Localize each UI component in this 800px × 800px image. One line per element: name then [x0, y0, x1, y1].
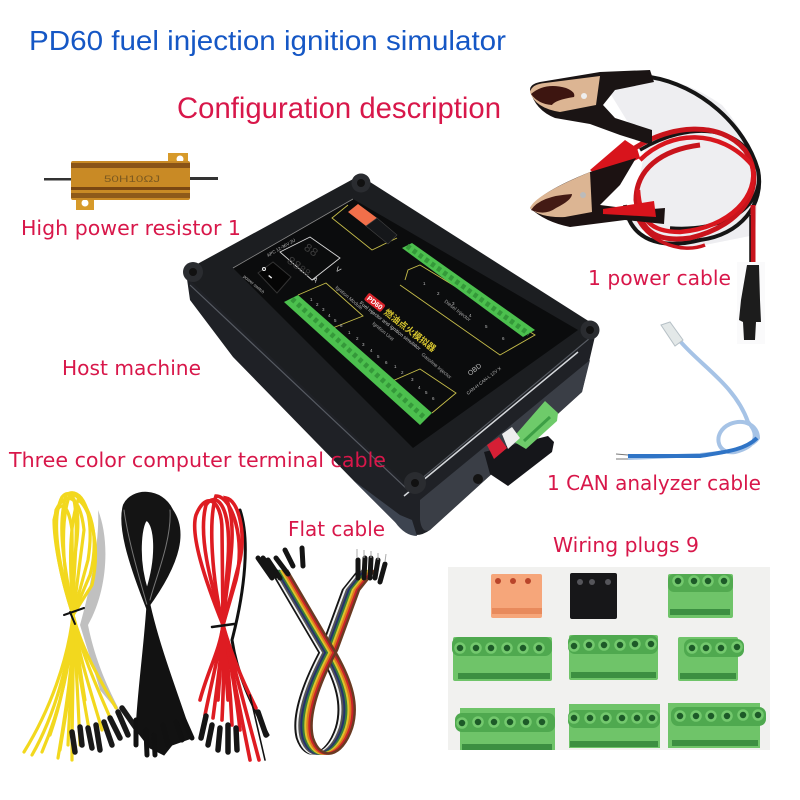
- plug: green 4 pin: [668, 574, 733, 618]
- pin numbers left: 2: [401, 370, 404, 375]
- orange and black ports: [348, 204, 377, 226]
- host machine: APC 12-36V 2U: [266, 238, 296, 258]
- pin numbers left: 4: [328, 313, 331, 318]
- panel labels: Fuel injector and ignition simulator: [358, 301, 422, 352]
- pin numbers left: 6: [340, 323, 343, 328]
- host machine: OBD: [467, 363, 483, 378]
- plug: orange 3 pin: [491, 574, 542, 618]
- pin numbers left: 6: [432, 396, 435, 401]
- pin numbers left: 2: [356, 336, 359, 341]
- icon: flat ribbon cable: [258, 548, 386, 754]
- yellow outline groups: [280, 205, 535, 413]
- plug: green 6 pin: [455, 708, 555, 750]
- host machine: power switch: [242, 274, 266, 295]
- icon: red wire bundle: [195, 496, 268, 760]
- pin numbers left: [310, 281, 505, 401]
- pin numbers left: 4: [418, 385, 421, 390]
- pin numbers left: 5: [425, 390, 428, 395]
- pin numbers left: 4: [469, 313, 472, 318]
- side ports: [484, 436, 554, 486]
- plug: green 6 pin: [452, 637, 552, 681]
- panel: wiring plugs: [448, 567, 770, 750]
- label: terminal cable: Three color computer terminal cable: [8, 448, 386, 472]
- host machine: [183, 174, 600, 536]
- pin numbers left: 5: [377, 354, 380, 359]
- box top: [188, 177, 596, 486]
- voltage and current display: 88: [301, 241, 321, 261]
- plug: green 4 pin: [678, 637, 744, 681]
- host machine: Gasoline Injector: [420, 352, 453, 381]
- pin numbers left: 2: [437, 291, 440, 296]
- host machine: Ignition Module: [334, 285, 364, 311]
- voltage and current display: 88: [296, 264, 312, 280]
- red clip: [590, 140, 640, 178]
- DC plug: [737, 262, 765, 344]
- pin numbers left: 5: [485, 324, 488, 329]
- subtitle: Configuration description: [177, 92, 501, 125]
- power switch: [258, 262, 291, 293]
- pin numbers left: 3: [322, 307, 325, 312]
- icon: power cable with clips: [530, 70, 765, 344]
- panel face: [233, 199, 578, 448]
- label: CAN cable: 1 CAN analyzer cable: [547, 471, 761, 495]
- green terminal strips: [284, 295, 432, 425]
- label: host machine: Host machine: [62, 356, 201, 380]
- pin numbers left: 1: [423, 281, 426, 286]
- voltage and current display: [284, 241, 321, 280]
- pin numbers left: 3: [411, 377, 414, 382]
- icon: CAN analyzer cable: [616, 322, 758, 459]
- pin numbers left: 3: [362, 342, 365, 347]
- label: wiring plugs: Wiring plugs 9: [553, 533, 699, 557]
- panel labels: [358, 291, 438, 359]
- pin numbers left: 1: [394, 364, 397, 369]
- host machine: Diesel Injector: [443, 299, 472, 323]
- plug: black 3 pin: [570, 573, 617, 619]
- box sides: [186, 180, 596, 535]
- pin numbers left: 2: [316, 302, 319, 307]
- host machine: CAN-H CAN-L 12V X: [466, 366, 502, 396]
- voltage and current display: 88: [284, 254, 304, 274]
- icon: black wire bundle: [122, 493, 192, 755]
- pin numbers left: 4: [370, 348, 373, 353]
- host machine: Ignition Unit: [371, 321, 395, 343]
- pin numbers left: 6: [385, 360, 388, 365]
- plug: green 6 pin: [568, 704, 660, 748]
- pin numbers left: 5: [334, 318, 337, 323]
- icon: high power resistor: 50H10ΩJ: [104, 174, 160, 184]
- pin numbers left: 3: [452, 301, 455, 306]
- host machine: V: [334, 266, 342, 275]
- label: flat cable: Flat cable: [288, 517, 385, 541]
- pin numbers left: 6: [502, 336, 505, 341]
- label: resistor: High power resistor 1: [21, 216, 241, 240]
- icon: yellow wire bundle: [24, 493, 136, 760]
- plug: green 6 pin: [568, 635, 658, 680]
- title: PD60 fuel injection ignition simulator: [29, 25, 506, 56]
- host machine: A: [311, 276, 319, 285]
- plug: green 6 pin: [668, 703, 766, 748]
- icon: high power resistor: [44, 153, 218, 210]
- pin numbers left: 1: [310, 297, 313, 302]
- black clip: [530, 70, 654, 145]
- panel labels: 燃油点火模拟器: [382, 306, 438, 354]
- panel labels: PD60: [365, 295, 383, 312]
- pin numbers left: 1: [348, 330, 351, 335]
- corner screws: [352, 174, 370, 192]
- label: power cable: 1 power cable: [588, 266, 731, 290]
